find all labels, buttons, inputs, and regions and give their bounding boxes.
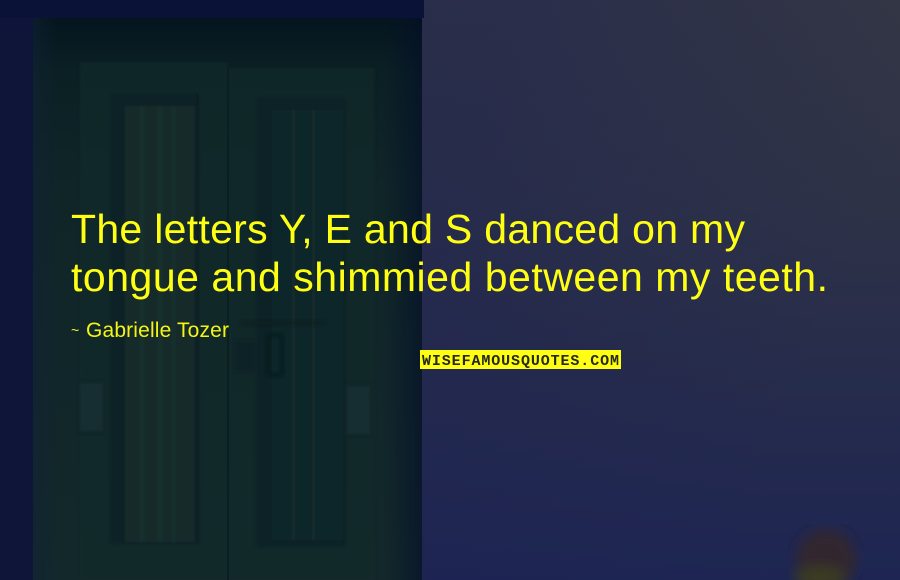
door: right leaf xyxy=(228,68,374,580)
door: centre seam xyxy=(227,68,229,580)
author name: Gabrielle Tozer xyxy=(86,319,229,342)
door: left leaf xyxy=(80,62,228,580)
door xyxy=(33,18,422,580)
quote text xyxy=(71,206,828,300)
door: left hinge plate xyxy=(79,382,104,432)
door: right hinge plate xyxy=(346,385,371,435)
quote line 1: The letters Y, E and S danced on my xyxy=(71,206,746,252)
tilde: ~ xyxy=(71,322,79,338)
badge: wisefamousquotes.com: WISEFAMOUSQUOTES.COM xyxy=(422,353,619,370)
plant in corner xyxy=(794,530,856,580)
door: latch xyxy=(235,323,325,375)
attribution xyxy=(71,319,229,342)
quote line 2: tongue and shimmied between my teeth. xyxy=(71,254,828,300)
